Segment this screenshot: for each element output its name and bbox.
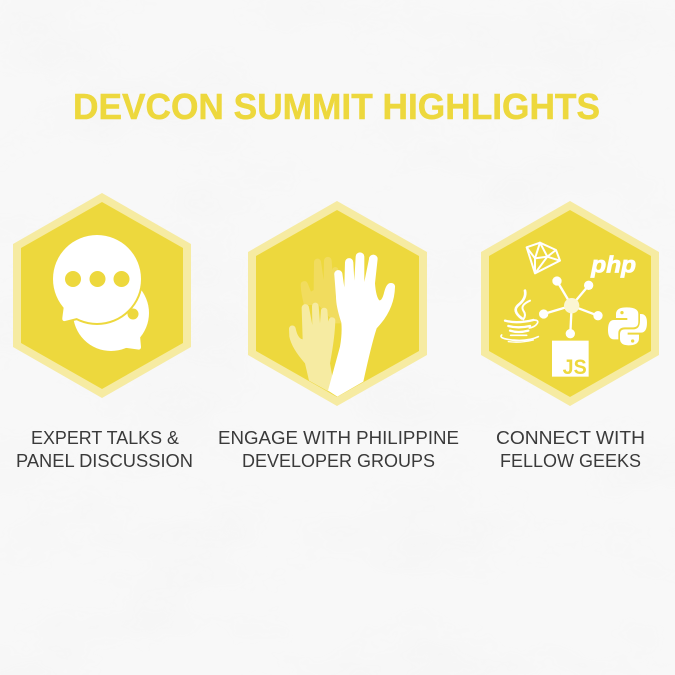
label: expert talks: [16, 427, 193, 471]
icon: javascript logo: [552, 341, 589, 379]
icon: chat bubbles: [51, 233, 149, 351]
hexagon badge: developer groups: [248, 201, 427, 406]
icon: java cup: [501, 291, 538, 342]
icon: ruby gem: [527, 243, 560, 273]
label: developer groups: DEVELOPER GROUPS: [242, 450, 435, 471]
label: developer groups: ENGAGE WITH PHILIPPINE: [218, 427, 459, 448]
label: fellow geeks: CONNECT WITH: [496, 427, 645, 448]
icon: php logo: php: [590, 252, 636, 278]
title: DEVCON SUMMIT HIGHLIGHTS: [73, 86, 600, 127]
panel: developer groups: [218, 201, 459, 471]
icon: technology logos: [501, 243, 647, 379]
hexagon badge: expert talks: [13, 193, 191, 398]
panel: expert talks: [13, 193, 193, 471]
icon: network hub: [539, 276, 603, 338]
icon: raised hands: [289, 252, 395, 397]
label: expert talks: EXPERT TALKS &: [31, 427, 180, 448]
panel: fellow geeks: [481, 201, 659, 471]
label: fellow geeks: [496, 427, 645, 471]
label: expert talks: PANEL DISCUSSION: [16, 450, 193, 471]
label: developer groups: [218, 427, 459, 471]
icon: javascript logo: JS: [563, 354, 587, 379]
hexagon badge: fellow geeks: [481, 201, 659, 406]
label: fellow geeks: FELLOW GEEKS: [500, 450, 641, 471]
icon: python logo: [608, 307, 647, 345]
